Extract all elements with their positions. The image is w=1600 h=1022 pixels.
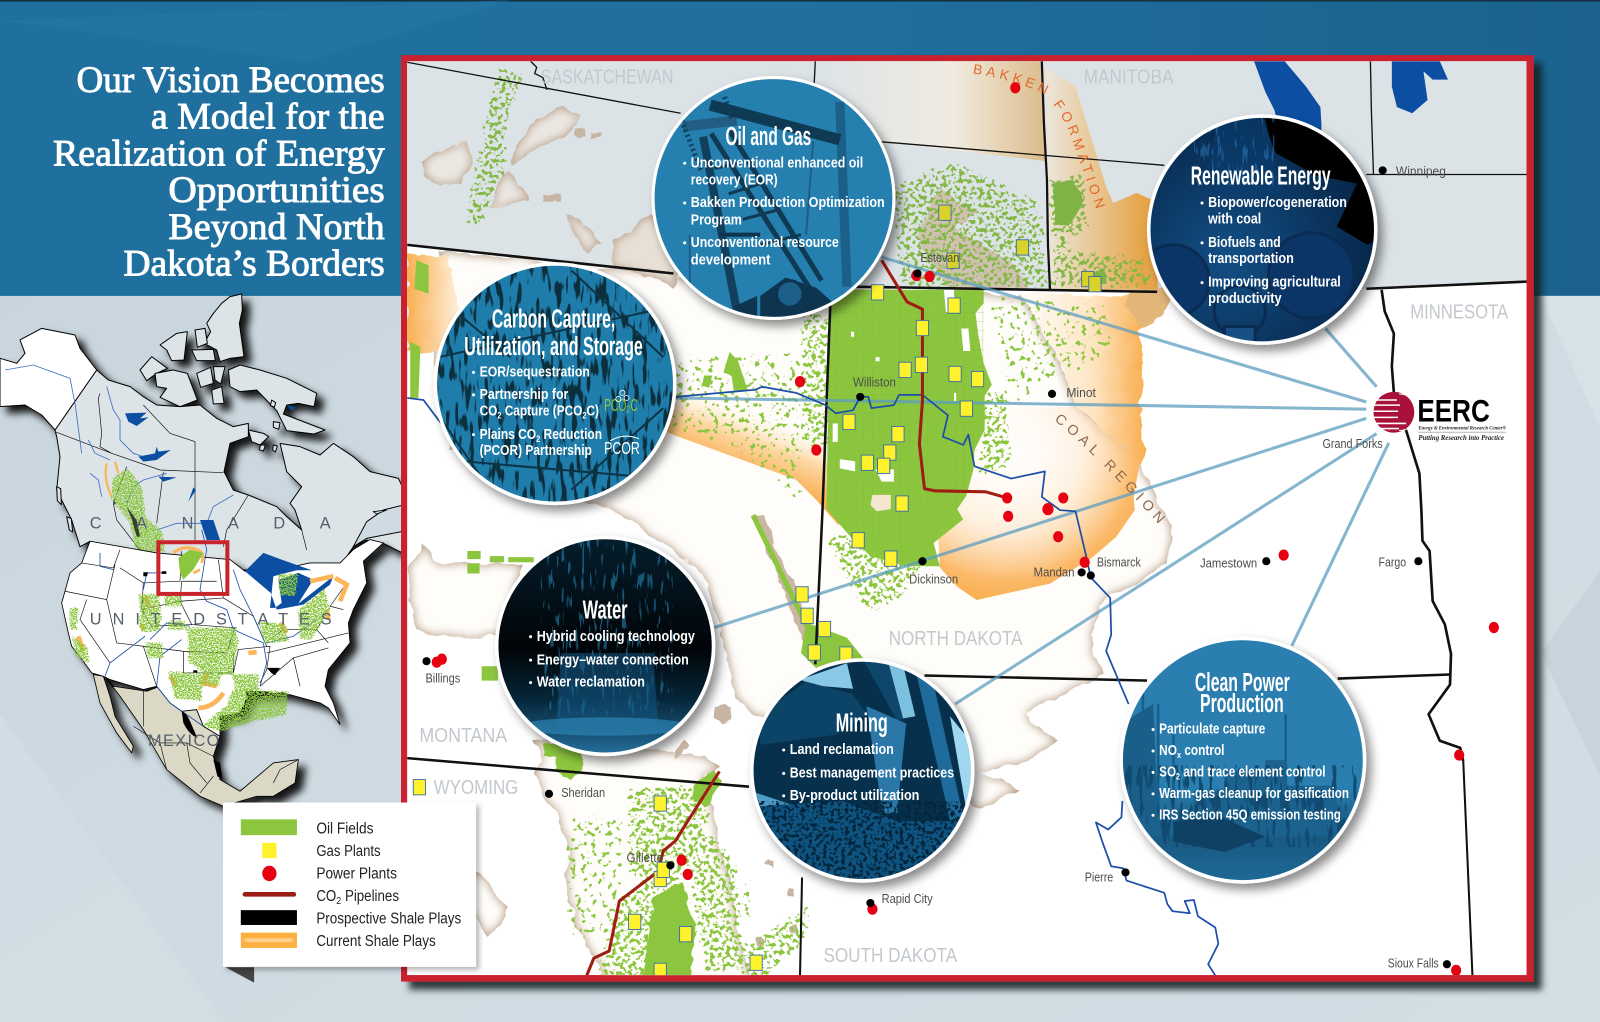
EERC logo: Putting Research into Practice [1418,433,1505,442]
locator map labels [90,515,332,750]
circle: Mining: By-product utilization [790,788,919,804]
legend: CO2 pipelines: Pipelines [341,888,399,905]
cities: Pierre [1085,870,1113,885]
cities: Billings [426,671,461,686]
cities: Minot [1066,385,1096,400]
circle: Mining [745,653,980,888]
title: a Model for the [151,96,385,137]
legend [223,803,476,983]
circle: Water: Water [583,596,628,624]
coal region outlines [408,103,1176,985]
circle: Carbon Capture, Utilization, and Storage: EOR/sequestration [480,365,590,381]
circle: Renewable Energy: with coal [1207,211,1261,227]
region labels: MANITOBA [1084,67,1174,89]
legend: prospective shale plays [241,910,462,927]
locator map labels: C A N A D A [90,515,331,533]
legend: CO2 pipelines: 2 [336,896,342,907]
circle: Clean Power Production: and trace element control [1180,764,1326,780]
circle: Clean Power Production [1117,633,1367,888]
circle: Oil and Gas: development [691,252,770,268]
circle: Oil and Gas: Bakken Production Optimization [691,195,885,211]
title [53,59,385,283]
cities: Bismarck [1097,554,1141,569]
circle: Carbon Capture, Utilization, and Storage: (PCOR) Partnership [480,443,592,459]
cities [422,164,1451,970]
gas plants [413,205,1101,979]
title: Opportunities [168,169,385,210]
circle: Water: Hybrid cooling technology [537,629,696,645]
Bakken Formation label: BAKKEN FORMATION [974,64,1105,208]
legend: power plants [262,866,397,883]
circle: Clean Power Production: 2 [1176,772,1180,782]
title: Realization of Energy [53,132,385,173]
EERC logo: Energy & Environmental Research Center® [1418,425,1507,432]
legend: gas plants [262,843,381,860]
circle: Water: Water reclamation [537,675,645,691]
circle: Renewable Energy: Biopower/cogeneration [1208,195,1347,211]
title: Dakota’s Borders [123,242,385,283]
circle: Oil and Gas: Program [691,212,742,228]
circle: Carbon Capture, Utilization, and Storage: CO [480,403,502,419]
circle: Carbon Capture, Utilization, and Storage: Capture (PCO [501,403,582,419]
region labels: MONTANA [419,725,507,747]
circle: Clean Power Production: IRS Section 45Q emission testing [1159,807,1341,823]
cities: Gillette [627,850,663,865]
circle: Mining: Mining [836,710,888,738]
cities: Sioux Falls [1388,955,1439,970]
power plants [432,82,1499,976]
cities: Williston [853,375,896,390]
circle: Oil and Gas: Oil and Gas [726,123,811,151]
circle: Mining: Land reclamation [790,742,894,758]
PCOR logo: PCOR [604,438,640,458]
circle: Clean Power Production: Clean Power [1195,669,1290,697]
oil fields [410,61,1153,985]
legend: prospective shale plays: Prospective Shale Plays [316,910,462,927]
circle: Renewable Energy: transportation [1208,251,1294,267]
circle: Renewable Energy: Biofuels and [1208,235,1281,251]
cities: Mandan [1034,565,1074,580]
title: Our Vision Becomes [77,59,385,100]
legend: CO2 pipelines [245,888,399,907]
legend: CO2 pipelines: CO [316,888,339,905]
circle: Carbon Capture, Utilization, and Storage: Plains CO [480,427,549,443]
PCO2C logo: PCO₂C [604,395,638,415]
circle: Carbon Capture, Utilization, and Storage: 2 [582,410,586,420]
cities: Winnipeg [1396,164,1446,179]
region labels: SOUTH DAKOTA [823,945,957,967]
Missouri river [407,387,1218,975]
circle: Clean Power Production: x [1177,750,1182,760]
region labels: NORTH DAKOTA [889,628,1023,650]
circle: Oil and Gas [643,71,908,327]
circle: Clean Power Production: Particulate capture [1159,722,1265,738]
legend: gas plants: Gas Plants [316,843,381,860]
circle: Carbon Capture, Utilization, and Storage: C) [586,403,599,419]
lake bodies [1254,61,1448,130]
Coal Region label: COAL REGION [1056,414,1166,524]
cities: Rapid City [882,891,933,906]
title: Beyond North [168,206,385,247]
circle: Renewable Energy: Improving agricultural [1208,275,1341,291]
state and provincial borders [407,61,1527,975]
cities: Sheridan [561,785,605,800]
circle: Clean Power Production: NO [1159,743,1181,759]
circle: Oil and Gas: Unconventional resource [691,235,839,251]
circle: Water [490,531,724,765]
legend: oil fields [241,819,374,838]
circle: Carbon Capture, Utilization, and Storage: Partnership for [480,387,569,403]
cities: Dickinson [909,572,958,587]
legend: current shale plays [241,933,436,950]
cities: Jamestown [1200,555,1257,570]
EERC logo [1373,392,1507,442]
circle: Water: Energy–water connection [537,652,689,668]
circle: Carbon Capture, Utilization, and Storage: Utilization, and Storage [464,333,643,361]
region labels: MINNESOTA [1410,301,1508,323]
circle: Carbon Capture, Utilization, and Storage: Reduction [540,427,602,443]
circle: Clean Power Production: Production [1200,690,1284,718]
EERC logo: EERC [1417,392,1490,428]
cities: Estevan [920,250,959,265]
circle: Oil and Gas: Unconventional enhanced oil [691,155,863,171]
locator map labels: MEXICO [148,732,219,750]
circle: Renewable Energy [1138,112,1388,352]
circle: Carbon Capture, Utilization, and Storage: Carbon Capture, [492,306,615,334]
circle: Clean Power Production: control [1181,743,1224,759]
region labels: SASKATCHEWAN [541,67,673,89]
PCO2C logo [604,390,638,415]
circle: Clean Power Production: Warm-gas cleanup for gasification [1159,786,1349,802]
circle: Oil and Gas: recovery (EOR) [691,173,778,189]
locator map labels: U N I T E D S T A T E S [90,610,332,628]
connector lines from EERC [676,257,1389,704]
circle: Renewable Energy: productivity [1208,291,1282,307]
circle: Clean Power Production: SO [1159,764,1181,780]
Bakken Formation shading [407,253,1140,600]
map frame [401,55,1548,996]
legend: current shale plays: Current Shale Plays [316,933,436,950]
circle: Carbon Capture, Utilization, and Storage: 2 [497,410,501,420]
PCOR logo [605,436,640,454]
circle: Mining: Best management practices [790,766,954,782]
legend: power plants: Power Plants [316,866,397,883]
region labels [419,67,1508,967]
legend: oil fields: Oil Fields [316,821,374,838]
circle: Carbon Capture, Utilization, and Storage [429,255,684,510]
circle: Carbon Capture, Utilization, and Storage: 2 [536,434,540,444]
cities: Fargo [1379,554,1406,569]
cities: Grand Forks [1322,436,1383,451]
circle: Renewable Energy: Renewable Energy [1191,163,1331,191]
region labels: WYOMING [434,777,518,799]
CO2 pipelines [587,260,1007,975]
North America locator map [0,294,410,806]
